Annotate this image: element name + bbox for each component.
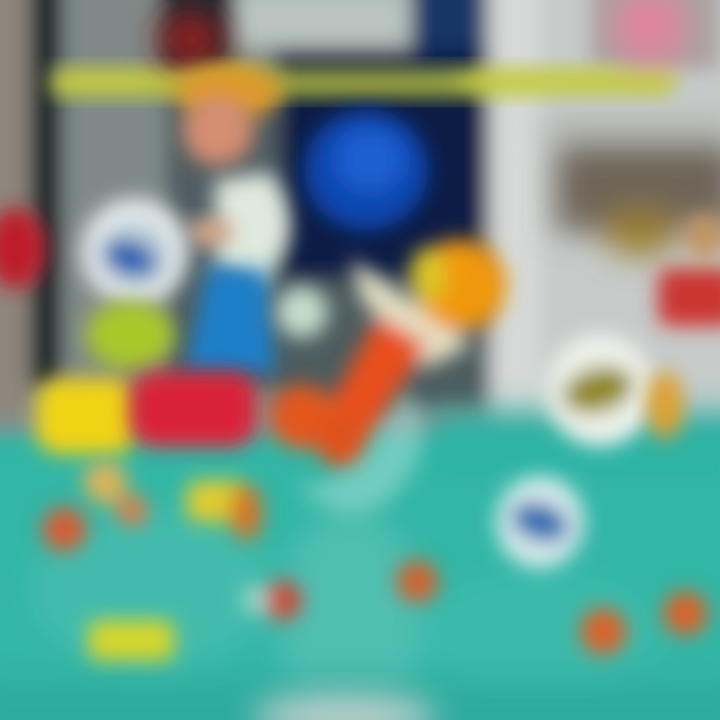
red toy on left edge	[0, 208, 46, 288]
yellow block	[36, 378, 136, 454]
hair	[176, 64, 280, 120]
orange dots	[42, 507, 707, 654]
orange fleck next to badge	[647, 371, 683, 439]
white circle badge with yellow icon	[546, 334, 654, 446]
shelf with toys	[158, 0, 720, 256]
pale green ball	[276, 286, 328, 338]
trousers	[185, 265, 275, 372]
white circle badge with blue icon, lower	[496, 476, 584, 568]
grey object at bottom edge	[253, 694, 437, 720]
orange trumpet toy	[270, 239, 506, 468]
background: teal floor	[0, 412, 720, 720]
arm	[186, 218, 234, 246]
green ball	[86, 301, 174, 369]
red toy on shelf	[658, 213, 720, 326]
red cushion	[130, 372, 256, 446]
yellow bar piece	[88, 620, 174, 660]
face	[182, 94, 254, 166]
white circle badge with blue icon	[81, 198, 189, 306]
blue ball	[304, 110, 428, 230]
yellow and orange toy pieces	[83, 460, 262, 540]
shirt	[215, 172, 290, 290]
background: upper room	[0, 0, 720, 440]
character figure	[176, 64, 290, 372]
translucent glass shape	[295, 385, 423, 513]
yellow banner	[50, 68, 675, 96]
